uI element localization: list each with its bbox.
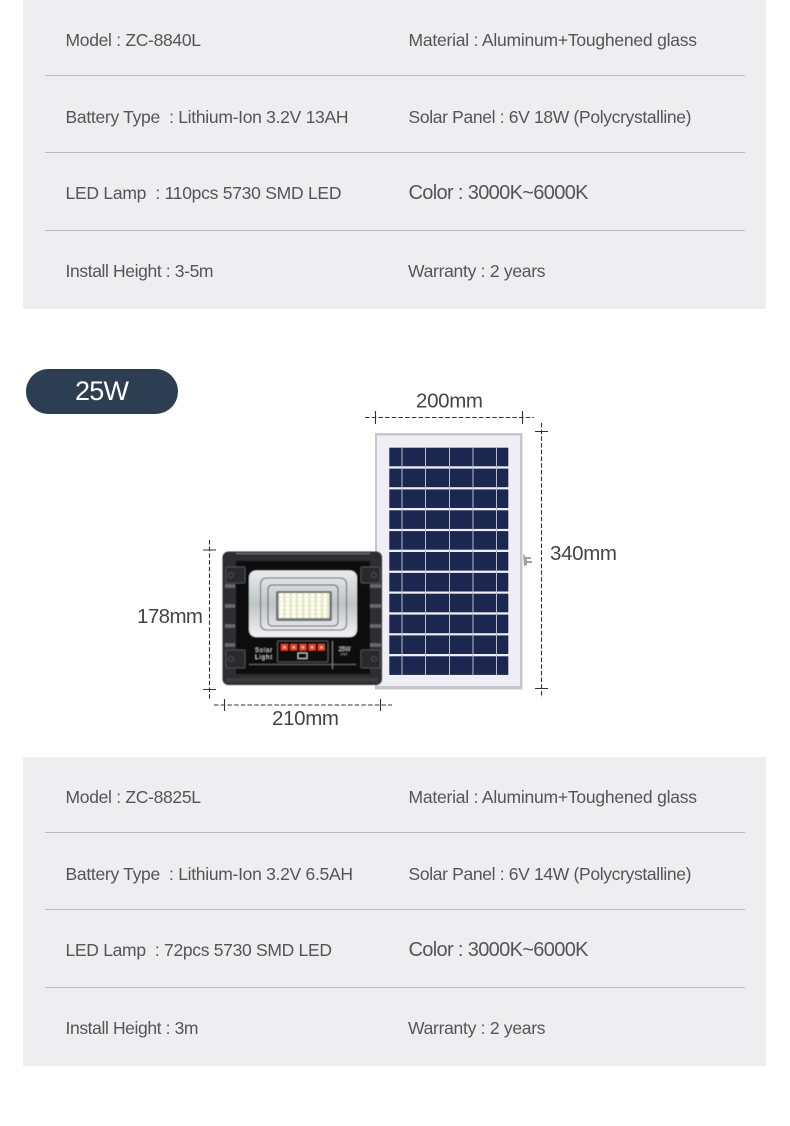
badge: 25W: 25W (75, 376, 130, 406)
floodlight illustration (222, 552, 382, 685)
spec: install height: Install Height : 3m (66, 1018, 198, 1038)
spec: warranty: Warranty : 2 years (408, 261, 546, 281)
LED array (276, 591, 332, 621)
photovoltaic cells (389, 448, 508, 675)
spec: color: Color : 3000K~6000K (408, 182, 589, 204)
side ribs (225, 586, 381, 645)
spec: material: Material : Aluminum+Toughened glass (408, 30, 697, 50)
dimension: panel width 200mm: 200mm (416, 390, 483, 412)
floodlight illustration: IP67 (340, 652, 348, 656)
spec: warranty: Warranty : 2 years (408, 1018, 546, 1038)
spec: solar panel: Solar Panel : 6V 18W (Polycrystalline) (408, 107, 692, 127)
junction box (523, 554, 532, 566)
dimension: lamp width 210mm: 210mm (272, 707, 339, 730)
panel: 25W specifications (23, 757, 766, 1066)
dimension: lamp height 178mm (137, 540, 216, 699)
spec: model: Model : ZC-8825L (66, 787, 201, 807)
dimension: lamp height 178mm: 178mm (137, 605, 203, 628)
mounting brackets (226, 567, 380, 668)
spec: material: Material : Aluminum+Toughened glass (408, 787, 697, 807)
dimension: panel height 340mm (535, 423, 617, 698)
badge: 25W (26, 369, 178, 414)
spec: LED lamp: LED Lamp : 110pcs 5730 SMD LED (66, 183, 342, 203)
spec: battery type: Battery Type : Lithium-Ion 3.2V 13AH (66, 107, 348, 127)
spec: color: Color : 3000K~6000K (408, 939, 589, 961)
solar panel illustration (375, 433, 532, 690)
lamp label: 25W: 25W (338, 647, 351, 653)
floodlight illustration: Light (255, 655, 272, 661)
panel frame (375, 433, 522, 690)
spec: battery type: Battery Type : Lithium-Ion 3.2V 6.5AH (66, 864, 353, 884)
lamp label: Solar Light: Solar (255, 648, 272, 654)
spec: model: Model : ZC-8840L (66, 30, 201, 50)
spec: LED lamp: LED Lamp : 72pcs 5730 SMD LED (66, 940, 332, 960)
spec: solar panel: Solar Panel : 6V 14W (Polycrystalline) (408, 864, 692, 884)
lamp body (222, 552, 382, 685)
panel: 40W specifications (23, 0, 766, 309)
spec: install height: Install Height : 3-5m (66, 261, 214, 281)
reflector (249, 570, 357, 637)
dimension: lamp width 210mm (214, 699, 392, 730)
indicator box (278, 641, 328, 662)
dimension: panel width 200mm (365, 390, 534, 424)
dimension: panel height 340mm: 340mm (550, 542, 617, 565)
